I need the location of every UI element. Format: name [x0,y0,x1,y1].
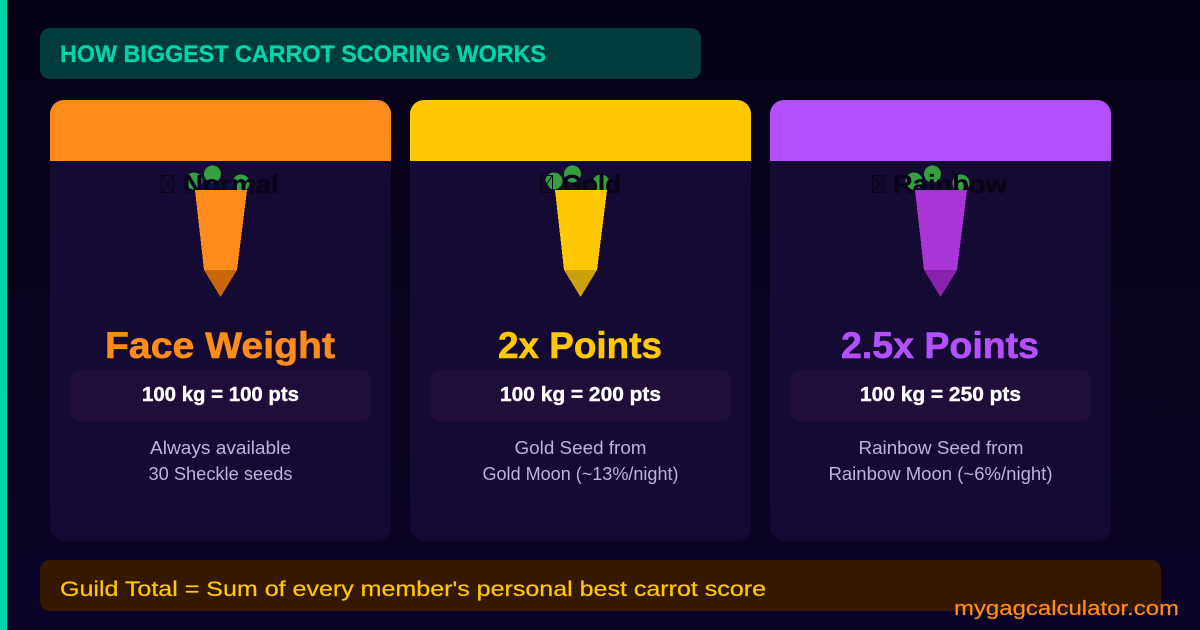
icon: missing-glyph box [872,176,884,192]
guild total callout [40,560,1161,611]
multiplier heading: Face Weight: Face Weight [105,325,335,366]
panel: normal carrot [50,100,391,541]
icon: rainbow carrot [915,190,967,297]
score example box: 100 kg = 100 pts [142,384,299,406]
multiplier heading: 2.5x Points: 2.5x Points [841,325,1039,366]
description: Rainbow Seed from [858,438,1024,458]
score example box [70,370,371,421]
site credit: mygagcalculator.com [954,598,1179,620]
description: Gold Seed from [514,438,646,458]
score example box [790,370,1091,421]
panel: rainbow carrot [770,100,1111,541]
score example box [430,370,731,421]
icon: missing-glyph box [162,176,174,192]
panel label: Rainbow: Rainbow [893,169,1008,199]
panel label: Gold: Gold [562,169,621,199]
description [482,438,678,484]
icon: gold carrot [555,190,607,297]
score example box: 100 kg = 200 pts [500,384,661,406]
description: Rainbow Moon (~6%/night) [828,464,1052,484]
description [148,438,292,484]
description: Always available [150,438,291,458]
description: Gold Moon (~13%/night) [482,464,678,484]
title banner [40,28,701,79]
title banner: HOW BIGGEST CARROT SCORING WORKS [60,41,546,68]
panel: gold carrot [410,100,751,541]
description: 30 Sheckle seeds [148,464,292,484]
icon: missing-glyph box [540,176,552,192]
multiplier heading: 2x Points: 2x Points [498,325,662,366]
guild total callout: Guild Total = Sum of every member's personal best carrot score [60,578,766,601]
score example box: 100 kg = 250 pts [860,384,1021,406]
icon: normal carrot [195,190,247,297]
panel label: Normal: Normal [183,169,279,199]
description [828,438,1052,484]
